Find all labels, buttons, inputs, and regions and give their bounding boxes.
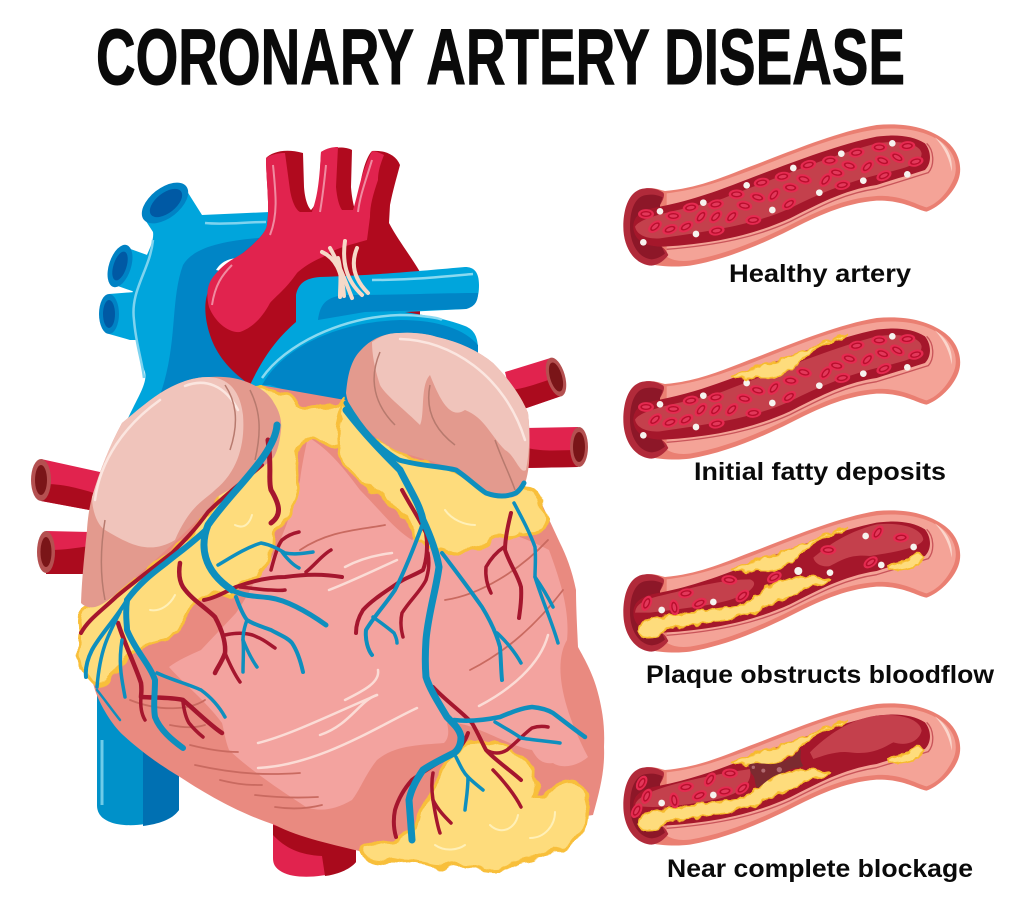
plaque deposits bbox=[638, 720, 924, 831]
blood clot bbox=[748, 749, 803, 788]
plaque deposits bbox=[638, 527, 924, 638]
atria bbox=[81, 333, 530, 607]
side pipes bbox=[31, 355, 588, 574]
fat: right band bbox=[338, 402, 550, 553]
fatty deposits bbox=[78, 388, 589, 869]
artery: near complete blockage bbox=[623, 703, 960, 846]
coronary arteries, red bbox=[81, 440, 548, 837]
heart illustration bbox=[31, 147, 604, 877]
cells and white cells bbox=[639, 523, 917, 616]
artery: initial fatty deposits bbox=[623, 317, 960, 460]
left atrium bbox=[81, 377, 281, 607]
superior vena cava bbox=[99, 175, 275, 432]
red blood cells, initial deposits bbox=[638, 333, 925, 439]
red blood cells, healthy bbox=[638, 140, 925, 246]
heart body bbox=[80, 385, 604, 852]
coronary veins, blue bbox=[86, 403, 585, 840]
pulmonary artery bbox=[250, 267, 479, 405]
label: plaque obstructs bloodflow: Plaque obstructs bloodflow bbox=[646, 661, 995, 689]
plaque: top deposit bbox=[732, 334, 847, 379]
artery: plaque obstructs bloodflow bbox=[623, 510, 960, 653]
lower red vessel bbox=[273, 820, 356, 877]
cells and white cells bbox=[628, 768, 752, 820]
ligament bbox=[322, 241, 368, 298]
fat: left band bbox=[78, 388, 350, 684]
aorta bbox=[205, 147, 420, 410]
artery: healthy bbox=[623, 124, 960, 267]
lower blue vena cava bbox=[97, 680, 179, 826]
fat: bottom right mass bbox=[362, 742, 589, 869]
label: initial fatty deposits: Initial fatty deposits bbox=[694, 458, 946, 486]
fat highlights bbox=[150, 510, 555, 850]
label: healthy artery: Healthy artery bbox=[729, 260, 911, 288]
label: near complete blockage: Near complete blockage bbox=[667, 855, 973, 883]
right atrium bbox=[346, 333, 530, 498]
